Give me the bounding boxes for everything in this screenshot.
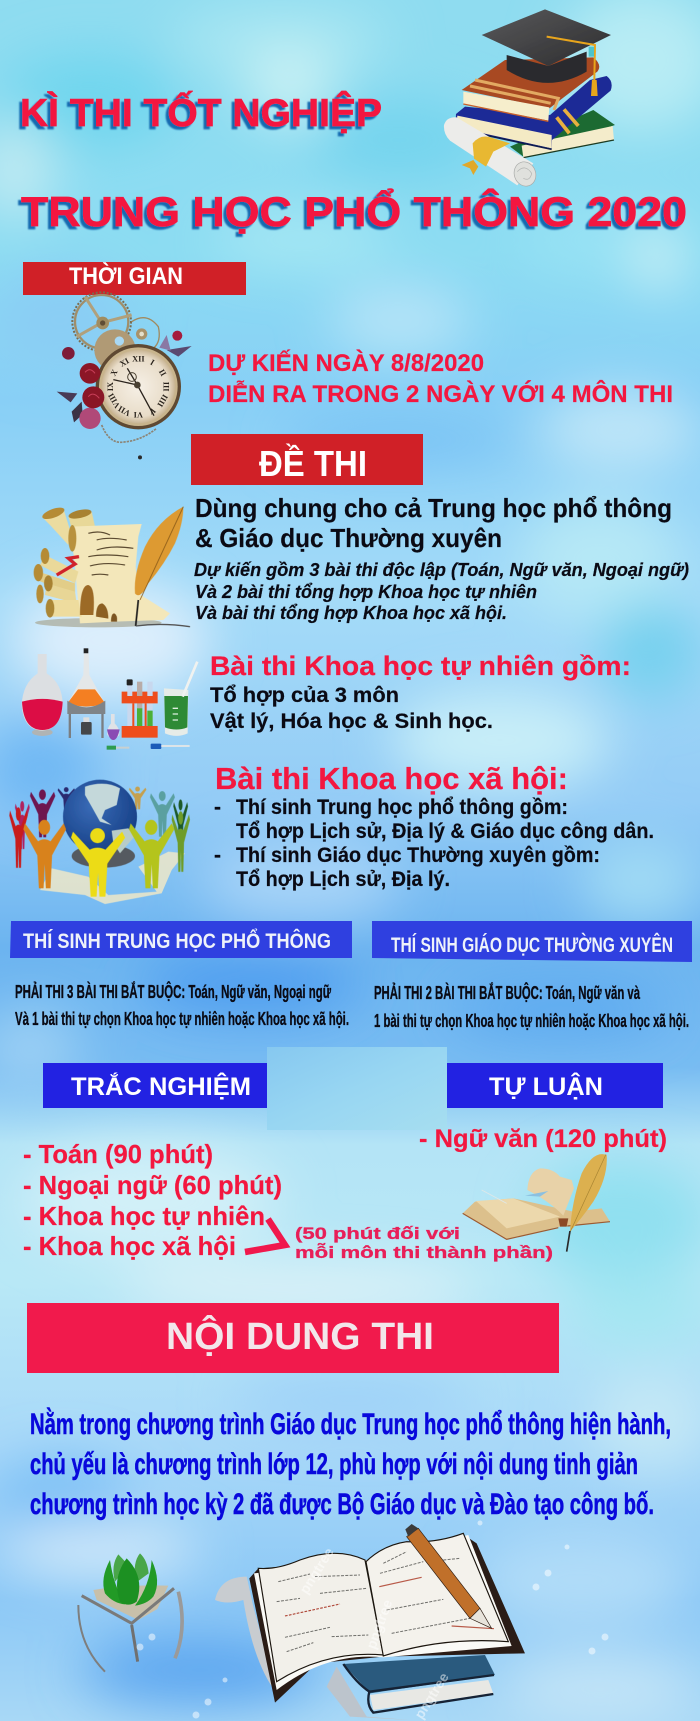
icon: chemistry flasks and test tubes bbox=[22, 648, 197, 750]
heading: essay: TỰ LUẬN bbox=[489, 1071, 603, 1101]
watermark text: pngtree bbox=[296, 1544, 337, 1597]
text: multiple choice subjects: - Khoa học xã hội bbox=[23, 1231, 236, 1261]
text: time note: mỗi môn thi thành phần) bbox=[295, 1243, 553, 1262]
icon: vintage clock with gears and flowers: XII bbox=[132, 354, 145, 363]
text: exam description: Dùng chung cho cả Trung học phổ thông bbox=[195, 493, 672, 523]
text: exam description: & Giáo dục Thường xuyên bbox=[195, 523, 502, 553]
icon: vintage clock with gears and flowers: II bbox=[157, 368, 168, 378]
icon: vintage clock with gears and flowers: I bbox=[149, 358, 156, 367]
icon: lotus on stand bbox=[78, 1553, 182, 1672]
icon: people around globe bbox=[9, 780, 190, 904]
panel: time heading: THỜI GIAN bbox=[69, 262, 183, 290]
text: social science exam: Tổ hợp Lịch sử, Địa lý. bbox=[236, 868, 450, 891]
text: time note: (50 phút đối với bbox=[295, 1225, 460, 1243]
icon: open notebook with pencil bbox=[215, 1524, 525, 1720]
panel: high school candidates: THÍ SINH TRUNG HỌC PHỔ THÔNG bbox=[23, 929, 331, 953]
panel: exam content heading bbox=[27, 1303, 559, 1373]
icon: vintage clock with gears and flowers: VII bbox=[117, 404, 132, 418]
icon: vintage clock with gears and flowers: III bbox=[162, 382, 171, 392]
text: exam description bbox=[194, 493, 689, 623]
text: social science exam: - bbox=[214, 796, 221, 819]
arrow: bracket bbox=[245, 1219, 285, 1252]
heading: multiple choice bbox=[43, 1063, 267, 1108]
panel: exam content heading: NỘI DUNG THI bbox=[166, 1313, 434, 1358]
icon: vintage clock with gears and flowers: V bbox=[147, 405, 157, 416]
text: expected date: DIỄN RA TRONG 2 NGÀY VỚI 4 MÔN THI bbox=[208, 379, 673, 408]
text: social science exam: Bài thi Khoa học xã hội: bbox=[215, 761, 568, 796]
icon: graduation cap on books with diploma bbox=[444, 9, 615, 189]
text: social science exam: Thí sinh Giáo dục Thường xuyên gồm: bbox=[236, 844, 600, 867]
icon: vintage clock with gears and flowers: XI bbox=[118, 356, 131, 369]
text: natural science exam: Bài thi Khoa học tự nhiên gồm: bbox=[210, 651, 631, 681]
text: exam content description bbox=[30, 1407, 671, 1521]
text: exam description: Và bài thi tổng hợp Khoa học xã hội. bbox=[195, 603, 507, 623]
text: social science exam: - bbox=[214, 844, 221, 867]
title: KÌ THI TỐT NGHIỆP bbox=[20, 90, 382, 135]
heading: essay bbox=[447, 1063, 663, 1108]
text: exam description: Dự kiến gồm 3 bài thi độc lập (Toán, Ngữ văn, Ngoại ngữ) bbox=[194, 560, 689, 580]
text: social science exam: Tổ hợp Lịch sử, Địa lý & Giáo dục công dân. bbox=[236, 820, 654, 843]
text: multiple choice subjects: - Khoa học tự nhiên bbox=[23, 1201, 265, 1231]
icon: vintage clock with gears and flowers: VIII bbox=[106, 392, 122, 410]
panel: high school candidates bbox=[10, 921, 352, 1029]
text: natural science exam: Tổ hợp của 3 môn bbox=[210, 684, 399, 707]
panel: exam heading bbox=[191, 434, 423, 485]
watermark text: pngtree bbox=[411, 1669, 452, 1721]
title bbox=[20, 90, 687, 235]
title: TRUNG HỌC PHỔ THÔNG 2020 bbox=[21, 186, 687, 235]
panel: continuing education candidates bbox=[372, 921, 692, 1031]
icon: open book and quill bbox=[463, 1154, 610, 1252]
icon: vintage clock with gears and flowers: VI bbox=[134, 410, 143, 419]
text: social science exam bbox=[214, 761, 654, 891]
panel: high school candidates: PHẢI THI 3 BÀI THI BẮT BUỘC: Toán, Ngữ văn, Ngoại ngữ bbox=[15, 981, 332, 1002]
text: natural science exam bbox=[210, 651, 631, 733]
text: essay subject: - Ngữ văn (120 phút) bbox=[419, 1125, 667, 1153]
text: exam description: Và 2 bài thi tổng hợp Khoa học tự nhiên bbox=[195, 582, 537, 602]
heading: multiple choice: TRẮC NGHIỆM bbox=[71, 1071, 251, 1101]
text: multiple choice subjects: - Ngoại ngữ (60 phút) bbox=[23, 1170, 282, 1200]
text: natural science exam: Vật lý, Hóa học & Sinh học. bbox=[210, 710, 493, 733]
icon: vintage clock with gears and flowers: X bbox=[109, 368, 120, 378]
watermark text bbox=[136, 1520, 608, 1721]
text: multiple choice subjects bbox=[23, 1139, 282, 1261]
watermark text: pngtree bbox=[363, 1597, 395, 1651]
panel: high school candidates: Và 1 bài thi tự chọn Khoa học tự nhiên hoặc Khoa học xã hội. bbox=[15, 1009, 349, 1029]
text: expected date: DỰ KIẾN NGÀY 8/8/2020 bbox=[208, 349, 484, 377]
icon: parchment scrolls and quill bbox=[34, 505, 190, 627]
panel: time heading bbox=[23, 262, 246, 295]
text: time note bbox=[295, 1225, 553, 1262]
panel: exam heading: ĐỀ THI bbox=[259, 443, 367, 484]
icon: vintage clock with gears and flowers: IIII bbox=[155, 393, 170, 408]
text: expected date bbox=[208, 349, 673, 408]
icon: vintage clock with gears and flowers: IX bbox=[106, 382, 115, 391]
text: social science exam: Thí sinh Trung học phổ thông gồm: bbox=[236, 796, 568, 819]
text: multiple choice subjects: - Toán (90 phút) bbox=[23, 1139, 213, 1169]
icon: vintage clock with gears and flowers bbox=[57, 292, 192, 459]
